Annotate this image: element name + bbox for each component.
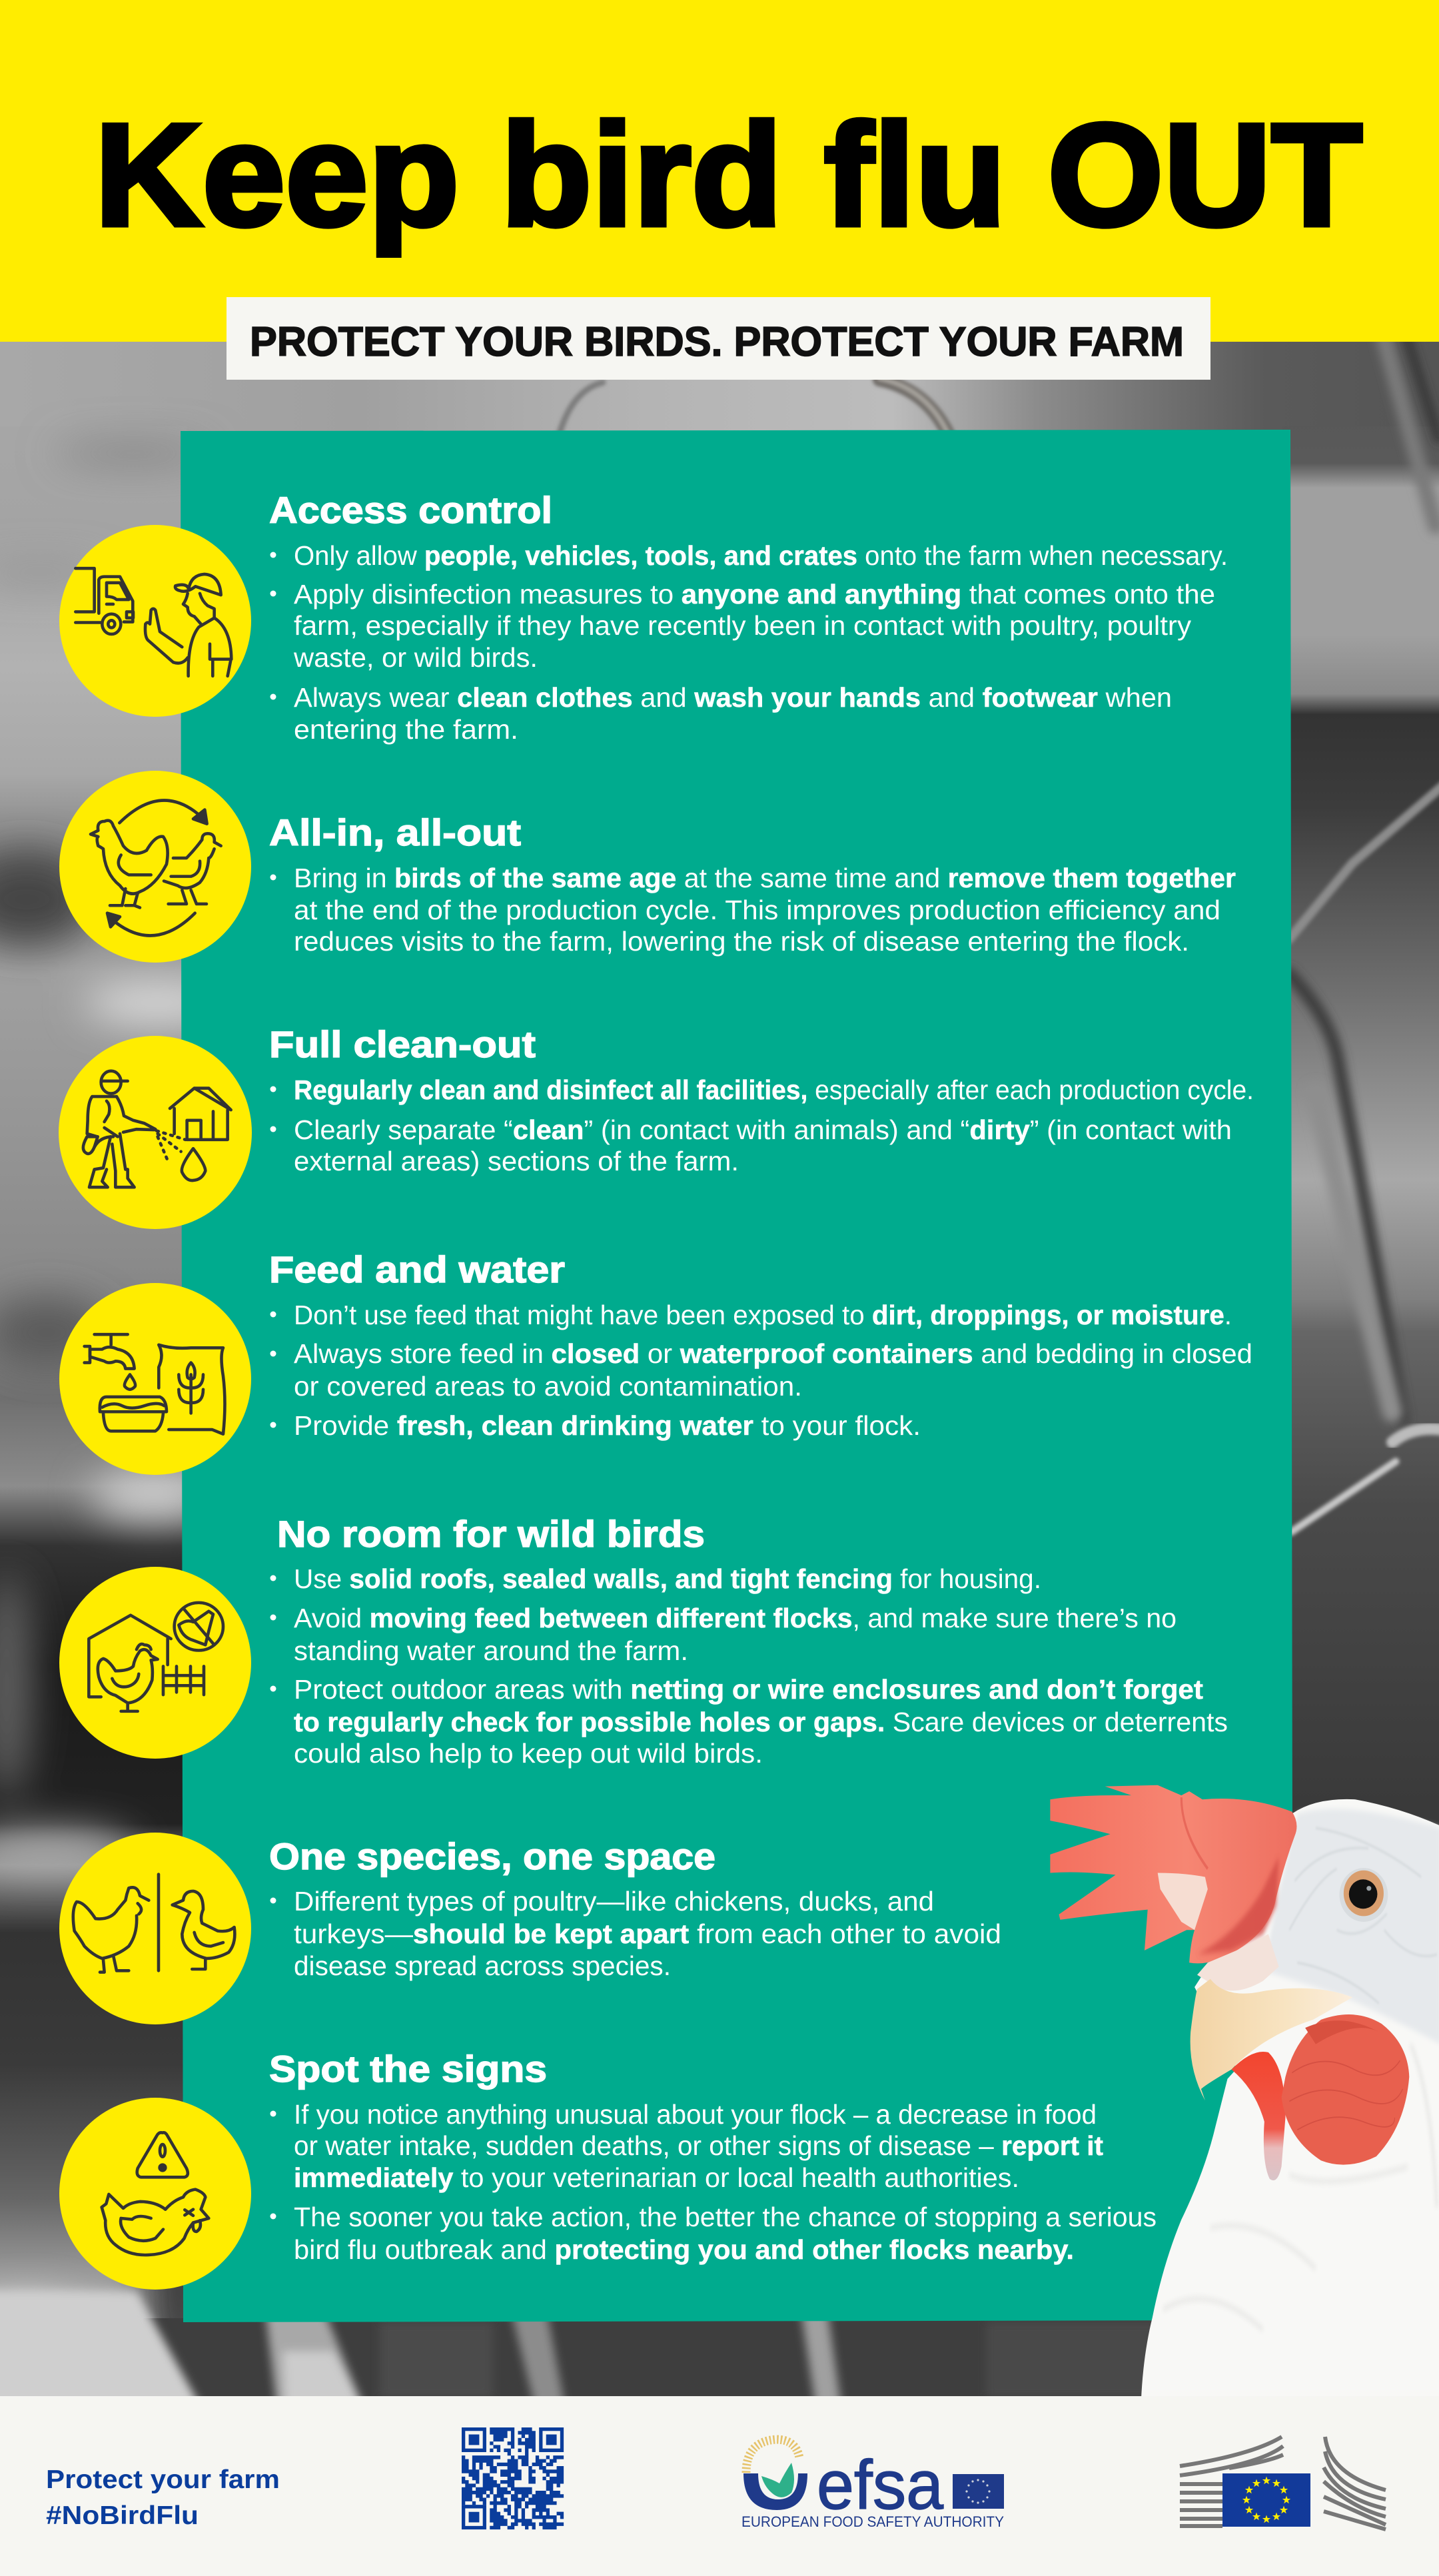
heading: feed and water: Feed and water xyxy=(269,1248,565,1290)
section: spot the signs xyxy=(269,2048,1157,2265)
EFSA blue crescent xyxy=(743,2473,807,2510)
QR code xyxy=(462,2427,564,2529)
bullets: spot the signs: The sooner you take action, the better the chance of stopping a serious xyxy=(294,2202,1157,2232)
heading: all-in all-out: All-in, all-out xyxy=(269,811,521,853)
heading: full clean-out: Full clean-out xyxy=(269,1023,536,1065)
bullets: no room for wild birds: standing water around the farm. xyxy=(294,1635,688,1666)
subtitle box: PROTECT YOUR BIRDS. PROTECT YOUR FARM xyxy=(250,319,1184,365)
icon: hen in house with fence, no wild birds xyxy=(59,1567,251,1759)
icon: truck stopped by farmer xyxy=(59,525,251,717)
bullets: one species one space: Different types of poultry—like chickens, ducks, and xyxy=(294,1886,934,1917)
campaign text xyxy=(46,2465,280,2530)
heading: no room for wild birds: No room for wild birds xyxy=(277,1513,705,1555)
bullets: all-in all-out: reduces visits to the farm, lowering the risk of disease entering the flock. xyxy=(294,926,1189,957)
bullets: all-in all-out: Bring in birds of the same age at the same time and remove them together xyxy=(294,863,1236,893)
bullets: no room for wild birds: Use solid roofs, sealed walls, and tight fencing for housing. xyxy=(294,1563,1041,1594)
bullets: access control xyxy=(270,540,1228,745)
chicken cere xyxy=(1197,1934,1279,1990)
icon: tap, water trough, feed bag xyxy=(59,1283,251,1475)
bullets: full clean-out: external areas) sections of the farm. xyxy=(294,1146,739,1176)
EFSA yellow dots arc xyxy=(746,2439,799,2473)
bullets: spot the signs: or water intake, sudden deaths, or other signs of disease – report it xyxy=(294,2130,1103,2161)
subtitle box xyxy=(227,297,1210,380)
bullets: no room for wild birds: could also help to keep out wild birds. xyxy=(294,1738,763,1769)
bullets: spot the signs: bird flu outbreak and protecting you and other flocks nearby. xyxy=(294,2234,1074,2265)
chicken photo xyxy=(1050,1785,1439,2401)
bullets: one species one space: disease spread across species. xyxy=(294,1950,671,1981)
section: full clean-out xyxy=(269,1023,1254,1176)
bullets: access control: Apply disinfection measures to anyone and anything that comes onto the xyxy=(294,579,1215,610)
chicken eye xyxy=(1340,1868,1388,1922)
bullets: access control: Always wear clean clothes and wash your hands and footwear when xyxy=(294,682,1172,713)
wires xyxy=(560,333,1439,1532)
bullets: spot the signs: If you notice anything unusual about your flock – a decrease in food xyxy=(294,2099,1097,2130)
EFSA full name: EUROPEAN FOOD SAFETY AUTHORITY xyxy=(741,2513,1004,2530)
EFSA green check xyxy=(761,2463,794,2497)
EC flag stars xyxy=(1242,2477,1290,2523)
section: all-in all-out xyxy=(269,811,1236,957)
bullets: access control: entering the farm. xyxy=(294,714,518,745)
section: feed and water xyxy=(269,1248,1252,1441)
chicken beak xyxy=(1191,1979,1352,2100)
bullets: no room for wild birds: to regularly check for possible holes or gaps. Scare devices or deterrents xyxy=(294,1707,1228,1737)
bullets: all-in all-out xyxy=(270,863,1236,957)
heading: one species one space: One species, one space xyxy=(269,1835,716,1877)
bullets: full clean-out: Clearly separate “clean” (in contact with animals) and “dirty” (in contact with xyxy=(294,1114,1232,1145)
bullets: feed and water: Don’t use feed that might have been exposed to dirt, droppings, or moisture. xyxy=(294,1300,1232,1330)
bullets: no room for wild birds xyxy=(270,1563,1228,1769)
chicken head shading xyxy=(1163,1809,1439,2330)
header band xyxy=(0,0,1439,342)
bullets: feed and water xyxy=(270,1300,1252,1441)
bullets: no room for wild birds: Avoid moving feed between different flocks, and make sure there’s no xyxy=(294,1603,1177,1633)
bullets: full clean-out: Regularly clean and disinfect all facilities, especially after each production cycle. xyxy=(294,1074,1254,1105)
section: access control xyxy=(269,489,1228,745)
title: Keep bird flu OUT xyxy=(95,94,1362,256)
EFSA logo xyxy=(741,2439,1004,2530)
chicken body xyxy=(1141,1799,1439,2401)
bottom band xyxy=(143,2318,1183,2398)
icon: worker spraying house xyxy=(59,1036,252,1229)
chicken throat wattle xyxy=(1231,2052,1285,2180)
European Commission logo xyxy=(1180,2437,1386,2529)
bullets: feed and water: or covered areas to avoid contamination. xyxy=(294,1371,802,1402)
panel: teal content background xyxy=(181,430,1293,2322)
bullets: one species one space: turkeys—should be kept apart from each other to avoid xyxy=(294,1919,1001,1949)
campaign text: Protect your farm xyxy=(46,2465,280,2494)
heading: spot the signs: Spot the signs xyxy=(269,2048,547,2090)
bullets: all-in all-out: at the end of the production cycle. This improves production efficiency and xyxy=(294,895,1220,925)
bullets: no room for wild birds: Protect outdoor areas with netting or wire enclosures and don’t forget xyxy=(294,1674,1203,1705)
heading: access control: Access control xyxy=(269,489,552,531)
bullets: spot the signs xyxy=(270,2099,1157,2265)
icon: warning triangle and sick hen xyxy=(59,2098,251,2290)
bullets: feed and water: Provide fresh, clean drinking water to your flock. xyxy=(294,1410,921,1441)
bullets: access control: farm, especially if they have recently been in contact with poultry, poultry xyxy=(294,610,1192,641)
bullets: spot the signs: immediately to your veterinarian or local health authorities. xyxy=(294,2162,1019,2193)
bullets: feed and water: Always store feed in closed or waterproof containers and bedding in closed xyxy=(294,1338,1252,1369)
EFSA wordmark: efsa xyxy=(817,2447,943,2524)
bullets: one species one space xyxy=(270,1886,1001,1981)
section: one species one space xyxy=(269,1835,1001,1981)
icon: hen and duck separated xyxy=(59,1833,251,2024)
chicken comb xyxy=(1050,1785,1296,1963)
EFSA EU flag xyxy=(953,2474,1004,2509)
bullets: access control: Only allow people, vehicles, tools, and crates onto the farm when necessary. xyxy=(294,540,1228,571)
icon: hens with cycle arrows xyxy=(59,771,251,963)
bullets: full clean-out xyxy=(270,1074,1254,1176)
Berlaymont building stripes xyxy=(1180,2437,1386,2529)
EC flag xyxy=(1222,2473,1310,2527)
bullets: access control: waste, or wild birds. xyxy=(293,642,538,673)
section: no room for wild birds xyxy=(270,1513,1228,1769)
chicken ear lobe xyxy=(1282,2014,1409,2165)
footer band xyxy=(0,2396,1439,2576)
campaign text: #NoBirdFlu xyxy=(46,2501,199,2530)
